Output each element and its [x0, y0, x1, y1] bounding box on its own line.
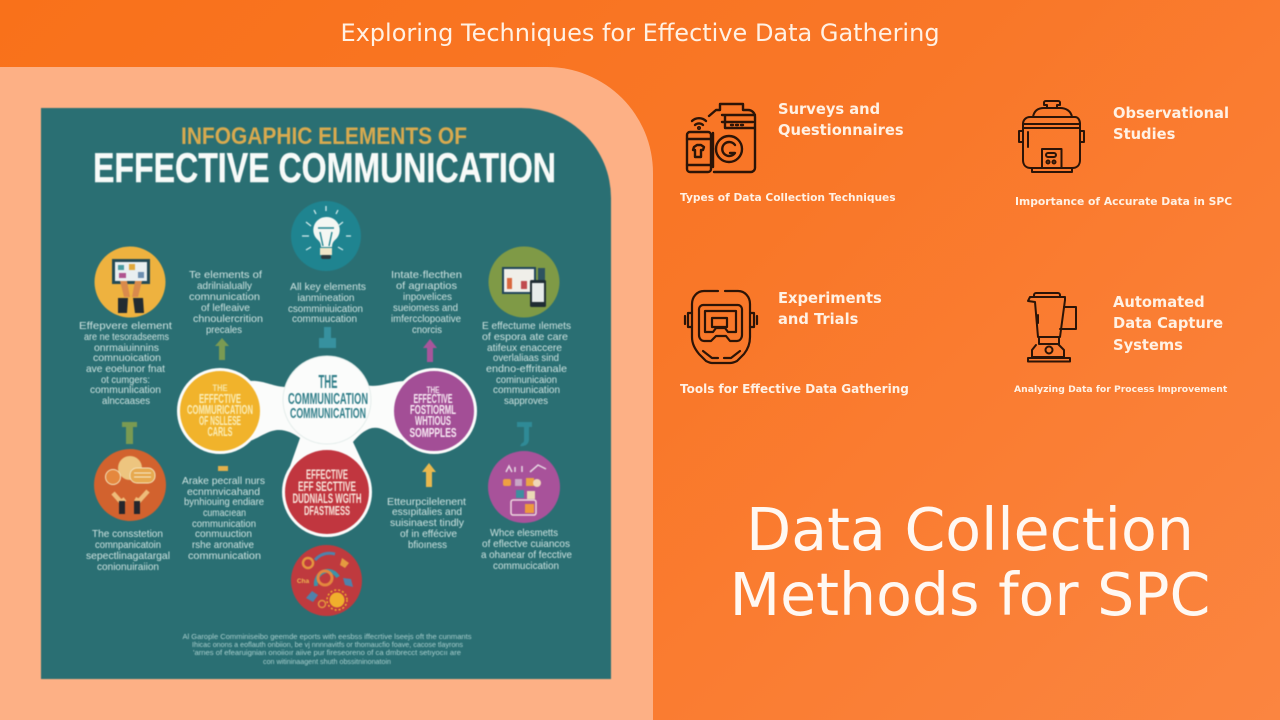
heading: surveys [778, 101, 904, 139]
icon: tablet with hands circle [94, 246, 166, 318]
heading: automated: Systems [1113, 337, 1183, 354]
text block: left upper: ot cumgers: [101, 374, 150, 386]
footer text: con witininaagent shuth obssitninonatoin [263, 657, 391, 666]
text block: upper fourth column: inpovelices [403, 291, 452, 303]
text block: lower second column: rshe aronative [192, 539, 254, 551]
icon: gears illustration circle: Cha [297, 578, 310, 585]
arrow: yellow up [422, 463, 436, 487]
text block: lower fourth column [387, 496, 466, 551]
hub: purple circle: FOSTIORML [410, 403, 456, 417]
poster: effective communication infographic [40, 107, 612, 680]
text block: upper fourth column: Intate·flecthen [391, 269, 462, 281]
text block: upper fourth column: imfercclopoative [391, 313, 461, 325]
text block: upper centre: commuucation [292, 313, 357, 325]
text block: lower fourth column: suisinaest tindly [390, 517, 465, 529]
text block: lower left [86, 528, 170, 573]
hub: yellow circle: CARLS [208, 425, 232, 439]
footer text: Ihicac onons a eoflauth onbiion, be vj nnnnavitfs or thomaucfio foave, cacose tlayrons [192, 640, 463, 649]
caption: importance: Importance of Accurate Data in SPC [1015, 195, 1232, 208]
heading: automated: Automated [1113, 294, 1205, 311]
hub: white centre circle [283, 356, 371, 444]
hub: white centre circle: COMMUNICATION [288, 391, 368, 408]
text block: upper fourth column: sueiomess and [393, 302, 458, 314]
text block: left upper: communlication [90, 384, 161, 396]
heading: automated: Data Capture [1113, 315, 1223, 332]
hub: red circle: DUDNIALS WGITH [292, 491, 362, 506]
text block: lower second column: conmuuction [195, 528, 252, 540]
poster eyebrow heading: INFOGAPHIC ELEMENTS OF [181, 123, 467, 150]
arrow: olive T [122, 422, 137, 444]
icon: speech bubbles and hands circle [94, 449, 166, 521]
icon: gears illustration circle [291, 545, 362, 616]
heading: experiments [778, 290, 882, 328]
text block: lower fourth column: of in effécive [400, 528, 457, 540]
text block: upper second column: comnunication [189, 291, 260, 303]
arrow: teal stem [319, 327, 336, 348]
text block: upper second column: Te elements of [189, 269, 262, 281]
text block: right upper: E effectume ılemets [482, 320, 571, 332]
heading: experiments: Experiments [778, 290, 882, 307]
hub: purple circle: SOMPPLES [410, 426, 456, 440]
text block: lower second column: ecnmnvicahand [187, 486, 260, 498]
arrow: teal J [517, 422, 532, 446]
text block: lower right: of eflectve cuiancos [482, 538, 570, 550]
icon: purple objects circle [488, 451, 560, 523]
main title [730, 496, 1210, 629]
text block: lower left: conionuiraiion [97, 561, 159, 573]
text block: upper fourth column [391, 269, 462, 336]
text block: lower second column: communication [188, 550, 261, 562]
hub: yellow circle: OF NSLLESE [199, 414, 241, 428]
footer text: 'arnes of efearuignian onoiioır aiive pur fireseoreno of ca dmbrecct setıyocıı are [193, 648, 461, 657]
footer text: Al Garople Comminiseibo geemde eports with eesbss iffecrtive lseejs oft the cunmants [182, 632, 472, 641]
text block: right upper: atifeux enaccere [487, 342, 562, 354]
text block: upper second column [189, 269, 263, 336]
text block: upper centre [288, 281, 366, 325]
hub: yellow circle: EFFFCTIVE [199, 392, 241, 406]
text block: right upper: overlaliaas sind [493, 352, 559, 364]
heading: experiments: and Trials [778, 311, 858, 328]
text block: upper centre: All key elements [290, 281, 366, 293]
hub: yellow circle: THE [212, 383, 228, 393]
text block: right upper: communication [493, 384, 560, 396]
hub: white centre circle: THE [318, 372, 338, 392]
text block: lower second column: cumacıean [203, 507, 246, 519]
text block: right upper [482, 320, 571, 407]
text block: upper second column: adrilnialually [197, 280, 253, 292]
icon: light bulb circle [291, 201, 361, 271]
hub: white centre circle: COMMUNICATION [290, 405, 366, 422]
caption: types: Types of Data Collection Techniques [680, 191, 896, 204]
arrow: purple up [423, 339, 437, 362]
white hub connectors [250, 381, 404, 472]
caption: tools: Tools for Effective Data Gathering [680, 382, 909, 396]
text block: right upper: of espora ate care [482, 331, 568, 343]
text block: lower second column: bynhiouing endiare [184, 496, 264, 508]
heading: automated [1113, 294, 1223, 354]
hub: red circle [284, 448, 370, 536]
icon: devices circle [488, 246, 560, 318]
text block: lower fourth column: Etteurpcilelenent [387, 496, 466, 508]
text block: right upper: sapproves [504, 395, 548, 407]
hub: red circle: EFFECTIVE [306, 467, 348, 482]
text block: lower left: The consstetion [92, 528, 163, 540]
heading: surveys: Surveys and [778, 101, 880, 118]
hub: purple circle [392, 370, 476, 452]
text block: lower second column [182, 475, 265, 562]
text block: upper second column: of lefleaive [201, 302, 250, 314]
left panel backdrop [0, 67, 653, 720]
hub: yellow circle: COMMURICATION [187, 403, 253, 417]
text block: lower right [481, 527, 572, 572]
text block: left upper: comnuoication [93, 352, 161, 364]
text block: upper fourth column: of agrıaptios [396, 280, 457, 292]
text block: upper second column: chnoulercrition [193, 313, 263, 325]
text block: lower left: sepectlinagatargal [86, 550, 170, 562]
footer text [182, 632, 472, 666]
text block: upper fourth column: cnorcis [412, 324, 442, 336]
hub: purple circle: THE [426, 385, 440, 395]
text block: lower right: a ohanear of fecctive [481, 549, 572, 561]
arrow: yellow dash [218, 466, 228, 471]
heading: surveys: Questionnaires [778, 122, 904, 139]
heading: observational [1113, 105, 1229, 143]
text block: lower fourth column: bfioıness [408, 539, 447, 551]
heading: observational: Observational [1113, 105, 1229, 122]
text block: upper centre: csomminiuication [288, 303, 363, 315]
text block: right upper: cominunicaion [496, 374, 557, 386]
text block: lower second column: communication [192, 518, 256, 530]
main title: Data Collection [746, 496, 1194, 564]
text block: left upper: are ne tesoradseems [84, 331, 169, 343]
text block: left upper: alnccaases [102, 395, 150, 407]
hub: red circle: DFASTMESS [304, 503, 350, 518]
text block: left upper: onrmaiuinnins [94, 342, 159, 354]
text block: lower left: comnpanicatoin [95, 539, 161, 551]
caption: analyzing: Analyzing Data for Process Improvement [1014, 384, 1227, 395]
text block: right upper: endno-effritanale [486, 363, 567, 375]
text block: upper centre: ianmineation [298, 292, 355, 304]
hub: purple circle: EFFECTIVE [414, 392, 452, 406]
text block: lower right: Whce elesmetts [490, 527, 558, 539]
title: Exploring Techniques for Effective Data Gathering [340, 19, 940, 47]
hub: red circle: EFF SECTTIVE [298, 479, 356, 494]
hub: purple circle: WHTIOUS [415, 414, 451, 428]
header band [0, 0, 1280, 67]
text block: left upper: Effepvere element [79, 320, 172, 332]
text block: left upper: ave eoelunor fnat [86, 363, 165, 375]
text block: left upper [79, 320, 172, 407]
main title: Methods for SPC [730, 561, 1210, 629]
text block: upper second column: precales [206, 324, 242, 336]
text block: lower second column: Arake pecrall nurs [182, 475, 265, 487]
text block: lower right: commucication [493, 560, 559, 572]
text block: lower fourth column: essıpitalies and [392, 506, 462, 518]
arrow: olive up [215, 338, 229, 360]
heading: observational: Studies [1113, 126, 1175, 143]
hub: yellow circle [178, 370, 262, 452]
